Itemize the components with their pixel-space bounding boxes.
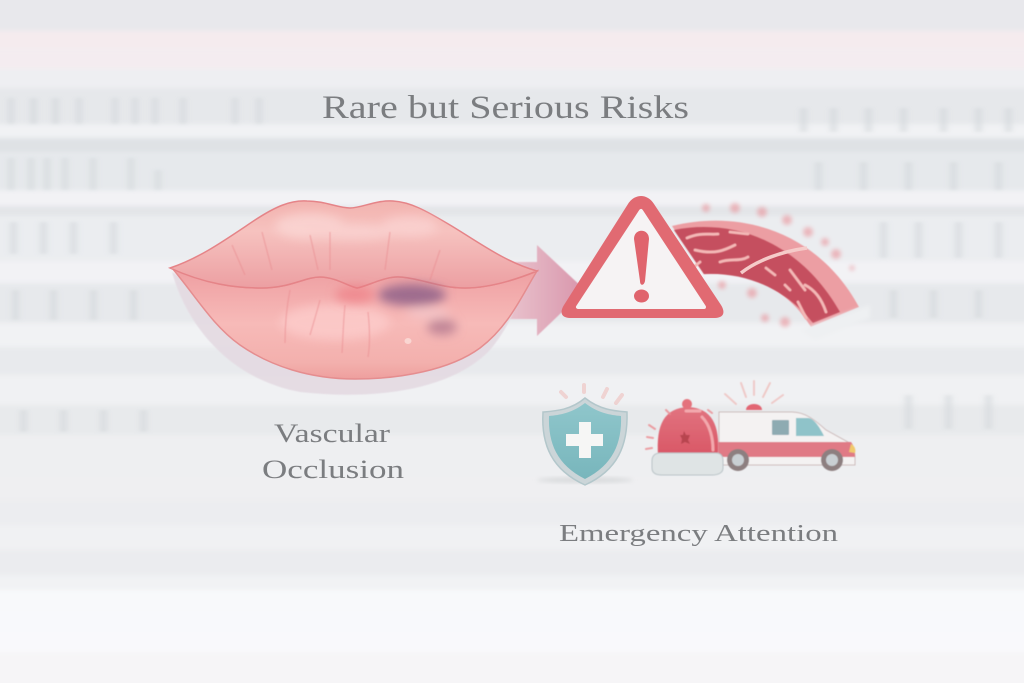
arrow — [490, 245, 585, 336]
icon: damaged blood vessel — [672, 203, 870, 340]
lip highlights — [275, 213, 438, 340]
vessel glow dots — [702, 203, 854, 327]
lip creases — [232, 232, 440, 357]
lips shadow — [172, 272, 522, 395]
icon: warning triangle — [562, 196, 723, 318]
icon: ambulance — [718, 381, 855, 471]
icon: lips — [170, 201, 537, 395]
label: vascular occlusion — [262, 419, 404, 484]
title: Rare but Serious Risks — [322, 90, 689, 126]
icon: shield — [537, 385, 633, 485]
upper lip — [170, 201, 537, 288]
label: emergency attention: Emergency Attention — [559, 521, 838, 547]
bruise — [335, 284, 457, 335]
label: vascular occlusion: Occlusion — [262, 455, 404, 484]
lower lip — [172, 268, 537, 379]
icon: emergency siren — [646, 399, 723, 475]
exclamation mark — [634, 231, 649, 285]
label: vascular occlusion: Vascular — [274, 419, 390, 448]
